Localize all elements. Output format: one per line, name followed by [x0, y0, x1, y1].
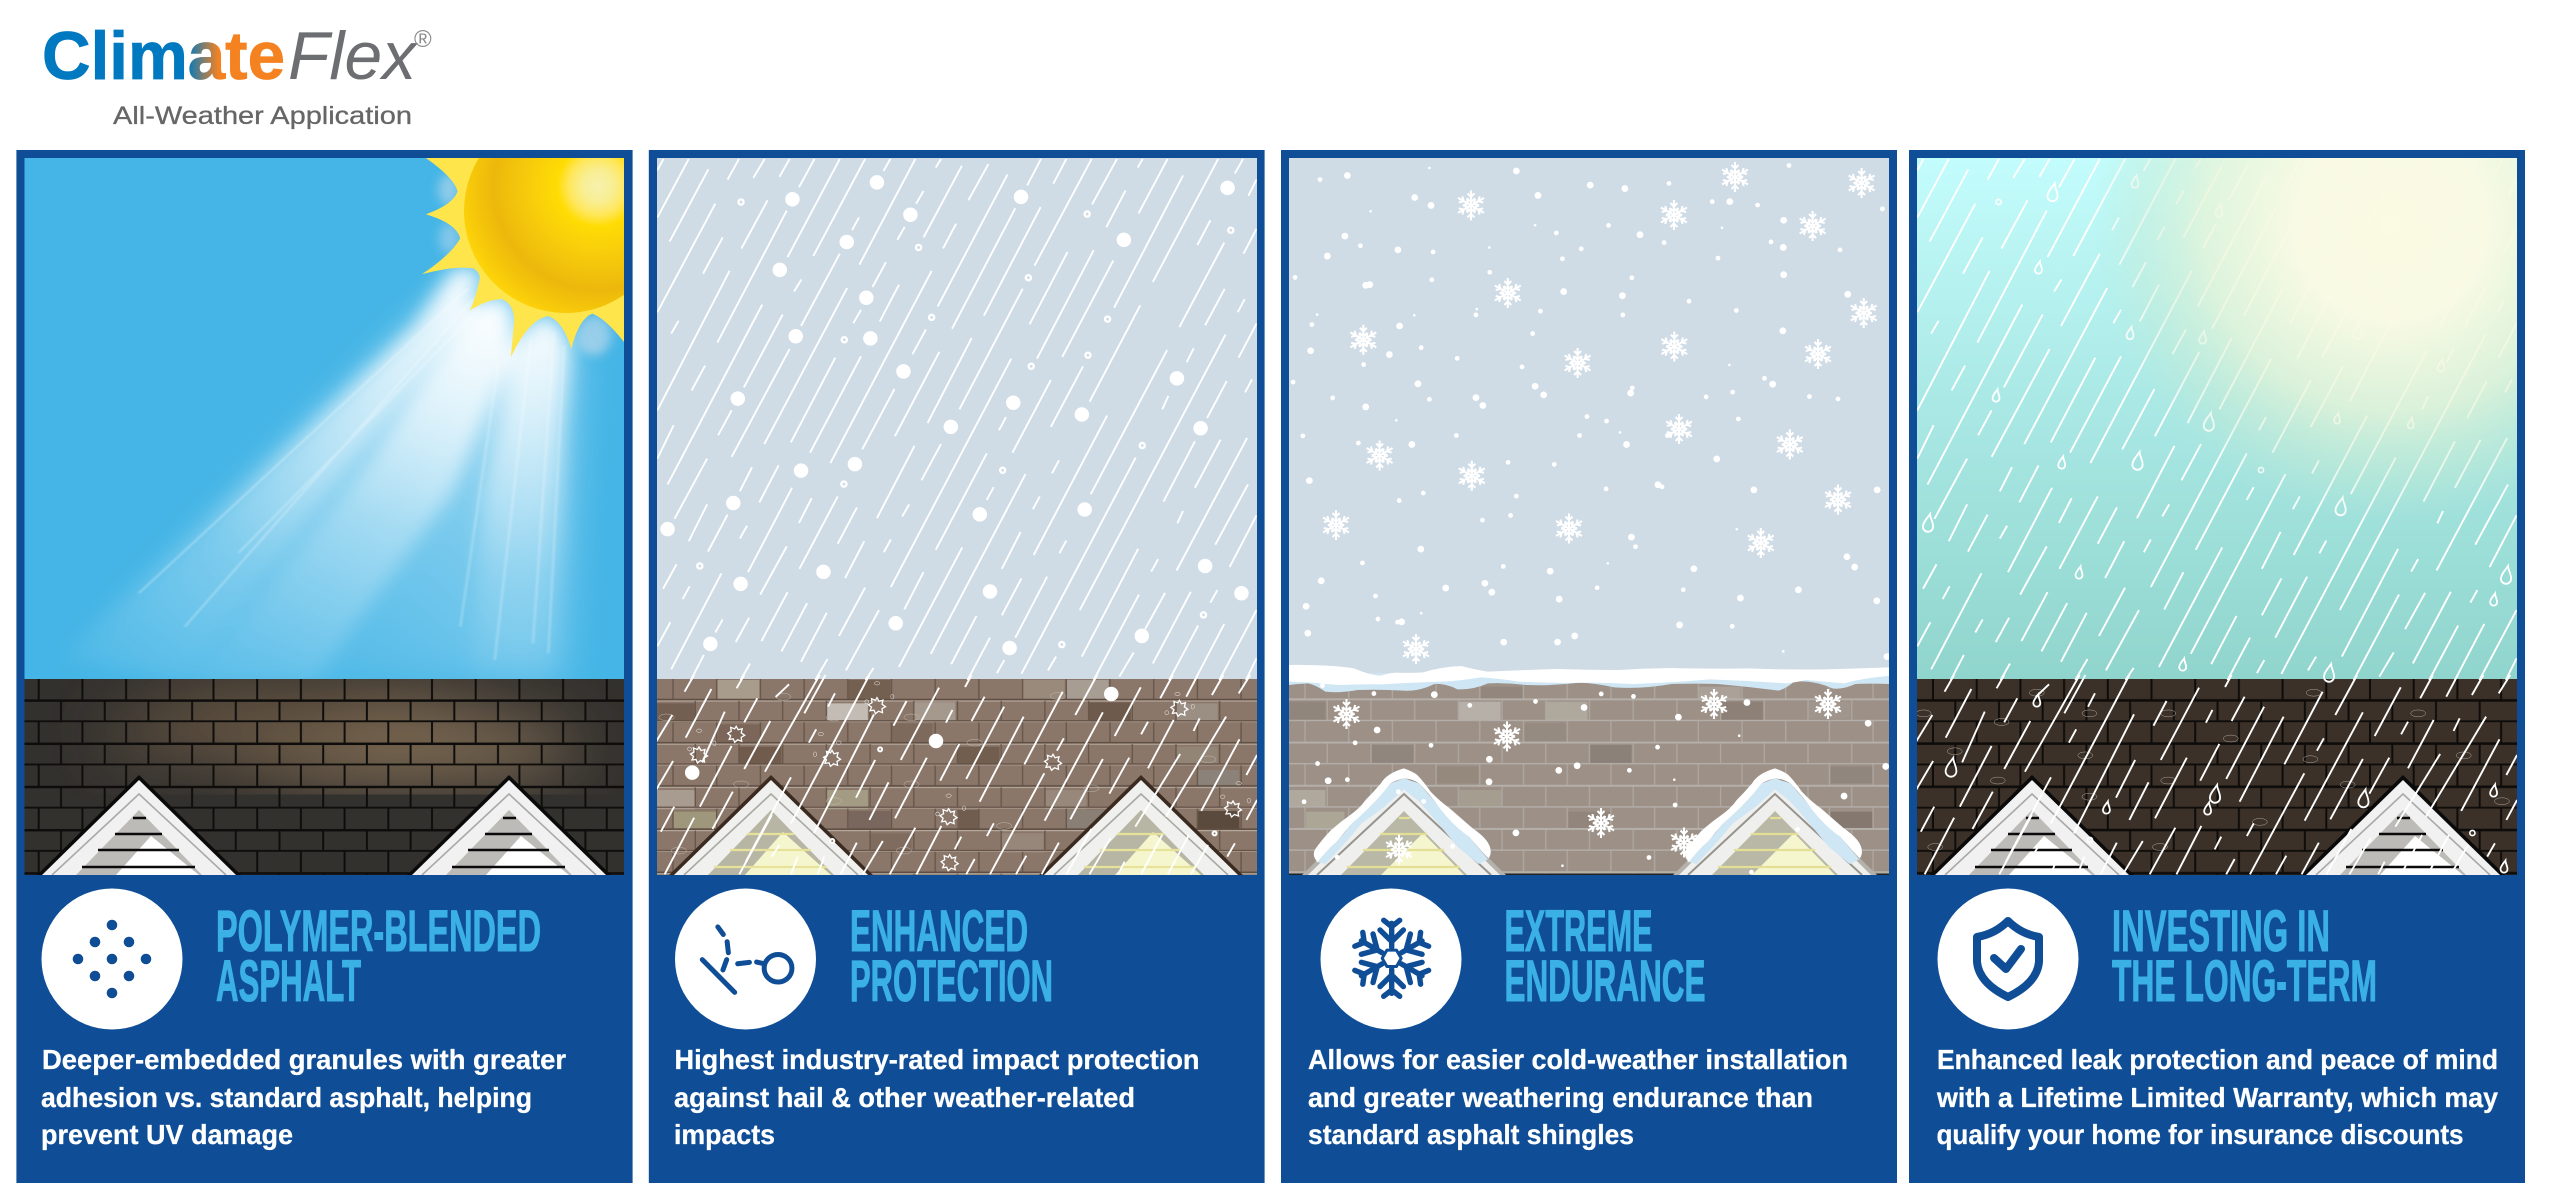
- body text: against hail & other weather-related: [674, 1082, 1135, 1113]
- panel background: [649, 150, 1265, 1183]
- dormer right: [1039, 775, 1243, 875]
- sun glow: [2107, 158, 2517, 512]
- heading: [1504, 899, 1706, 1014]
- notch highlights and light beams: [47, 158, 624, 683]
- panel: polymer-blended asphalt: [16, 109, 668, 1183]
- scene: sun over dark roof: [24, 109, 668, 875]
- roof dents: [1916, 689, 2509, 850]
- dormer left: [37, 775, 241, 875]
- sun disc: [464, 158, 624, 313]
- snowflakes on roof: [1332, 689, 1843, 858]
- logo: [42, 18, 432, 130]
- heading: EXTREME: [1504, 899, 1652, 964]
- icon: snowflake: [1320, 888, 1462, 1030]
- body text: [674, 1044, 1200, 1150]
- dormer left: [1302, 775, 1506, 875]
- dormer right: [1673, 775, 1877, 875]
- icon: granules: [42, 888, 182, 1030]
- raindrops: [1923, 175, 2511, 873]
- body text: [1936, 1044, 2498, 1150]
- hailstones: [668, 182, 1241, 841]
- heading: ENHANCED: [850, 899, 1028, 964]
- heading: PROTECTION: [850, 949, 1053, 1014]
- dormer left: [669, 775, 873, 875]
- heading: [2112, 899, 2377, 1014]
- panel: enhanced protection: [649, 150, 1265, 1183]
- heading: ENDURANCE: [1504, 949, 1706, 1014]
- body text: qualify your home for insurance discounts: [1936, 1119, 2464, 1150]
- body text: Deeper-embedded granules with greater: [42, 1044, 566, 1075]
- body text: and greater weathering endurance than: [1308, 1082, 1813, 1113]
- scene: rain and sun over dark roof: [1915, 158, 2517, 875]
- roof: [1917, 679, 2517, 875]
- snow on dormer right: [1685, 768, 1862, 864]
- snowflakes in sky: [1321, 162, 1879, 865]
- rain: [655, 159, 1257, 874]
- logo wordmark Climate: Climate: [42, 18, 285, 94]
- body text: Highest industry-rated impact protection: [674, 1044, 1200, 1075]
- roof: [1289, 679, 1889, 875]
- panel: investing in the long-term: [1909, 150, 2525, 1183]
- panel background: [1909, 150, 2525, 1183]
- roof: [24, 679, 624, 875]
- panel background: [1281, 150, 1897, 1183]
- body text: prevent UV damage: [41, 1119, 293, 1150]
- body text: with a Lifetime Limited Warranty, which may: [1936, 1082, 2498, 1113]
- panel: extreme endurance: [1281, 150, 1897, 1183]
- body text: Enhanced leak protection and peace of mind: [1937, 1044, 2498, 1075]
- body text: standard asphalt shingles: [1308, 1119, 1634, 1150]
- body text: Allows for easier cold-weather installation: [1308, 1044, 1848, 1075]
- heading: ASPHALT: [216, 949, 361, 1014]
- logo wordmark Flex: Flex: [288, 18, 418, 94]
- impact dents: [659, 682, 1251, 871]
- body text: [41, 1044, 566, 1150]
- snow on dormer left: [1314, 768, 1491, 864]
- roof: [657, 679, 1257, 875]
- dormer right: [407, 775, 611, 875]
- body text: impacts: [674, 1119, 775, 1150]
- snow dots: [1293, 165, 1887, 872]
- icon: shield with check: [1938, 888, 2078, 1030]
- dormer left: [1930, 775, 2134, 875]
- panel background: [16, 150, 633, 1183]
- snow line along roof: [1289, 665, 1889, 692]
- body text: adhesion vs. standard asphalt, helping: [41, 1082, 532, 1113]
- heading: [216, 899, 541, 1014]
- registered mark: ®: [414, 26, 432, 53]
- body text: [1308, 1044, 1848, 1150]
- heading: POLYMER-BLENDED: [216, 899, 541, 964]
- dormer right: [2301, 775, 2505, 875]
- tagline: All-Weather Application: [113, 102, 412, 130]
- sun rays: [422, 158, 624, 357]
- rain: [1915, 159, 2517, 874]
- icon: hail impact: [675, 888, 816, 1030]
- scene: hail and rain over brown roof: [655, 158, 1257, 875]
- scene: snowfall over snowy roof: [1289, 158, 1889, 875]
- heading: [850, 899, 1053, 1014]
- heading: INVESTING IN: [2112, 899, 2330, 964]
